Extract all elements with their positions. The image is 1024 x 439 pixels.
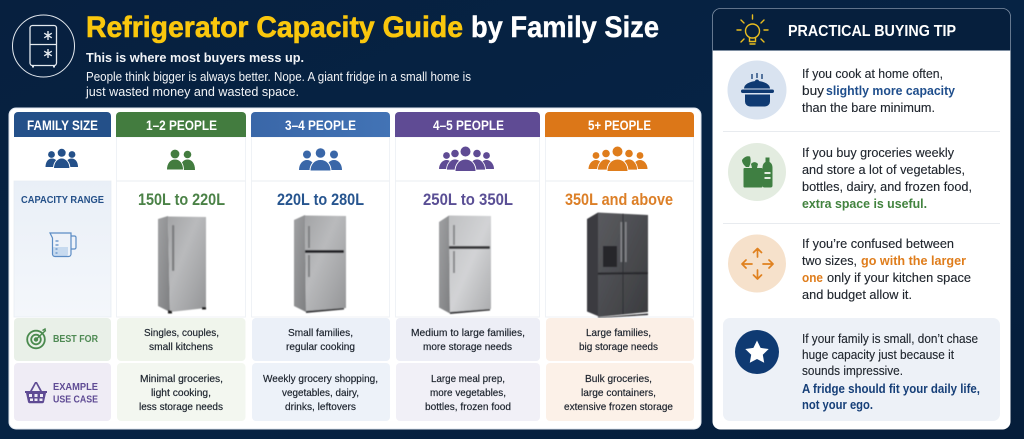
- column: family size labels: USE CASE: [53, 394, 98, 406]
- tip: cooking: slightly more capacity: [826, 84, 955, 98]
- column: 5+ people: 350L and above: [565, 191, 673, 209]
- tip: choosing between sizes: go with the larger: [861, 254, 966, 268]
- best for text: [286, 327, 355, 353]
- example use case text: Bulk groceries,: [585, 373, 652, 385]
- column: family size labels: [14, 112, 111, 421]
- best for text: more storage needs: [423, 341, 512, 353]
- best for text: Medium to large families,: [411, 327, 525, 339]
- example use case text: vegetables, dairy,: [282, 387, 359, 399]
- callout: small family advice: sounds impressive.: [802, 364, 903, 378]
- example use case text: large containers,: [581, 387, 656, 399]
- best for text: [144, 327, 219, 353]
- callout: small family advice: A fridge should fit your daily life,: [802, 382, 980, 396]
- column: family size labels: CAPACITY RANGE: [21, 194, 104, 206]
- subtitle text: [85, 50, 471, 99]
- tip: choosing between sizes: If you’re confused between: [802, 237, 954, 251]
- column: 3–4 people: 3–4 PEOPLE: [285, 118, 356, 133]
- tip: choosing between sizes: and budget allow it.: [802, 288, 912, 302]
- example use case text: Weekly grocery shopping,: [263, 373, 378, 385]
- tip: choosing between sizes: one: [802, 271, 823, 285]
- tip: choosing between sizes: [728, 234, 971, 302]
- column: 5+ people: 5+ PEOPLE: [588, 118, 651, 133]
- tip: cooking: If you cook at home often,: [802, 67, 943, 81]
- fridge: silver top freezer: [439, 216, 491, 314]
- column: 1–2 people: [116, 112, 246, 421]
- best for text: [411, 327, 525, 353]
- example use case text: less storage needs: [139, 401, 223, 413]
- icon: two people: [166, 150, 195, 170]
- best for text: Large families,: [586, 327, 651, 339]
- tip: choosing between sizes: only if your kitchen space: [827, 271, 971, 285]
- example use case text: more vegetables,: [430, 387, 506, 399]
- tip: cooking: buy: [802, 84, 825, 98]
- panel: practical buying tip: PRACTICAL BUYING TIP: [788, 23, 956, 40]
- tip: choosing between sizes: two sizes,: [802, 254, 857, 268]
- icon: five people: [588, 146, 648, 172]
- subtitle text: People think bigger is always better. Nope. A giant fridge in a small home is: [86, 70, 471, 84]
- column: 3–4 people: [251, 112, 390, 421]
- column: 4–5 people: [395, 112, 540, 421]
- best for text: small kitchens: [149, 341, 213, 353]
- icon: five people: [439, 146, 494, 172]
- icon: star badge: [735, 330, 779, 374]
- tip: groceries: bottles, dairy, and frozen food,: [802, 180, 972, 194]
- column: 3–4 people: 220L to 280L: [277, 191, 364, 209]
- example use case text: [263, 373, 378, 413]
- best for text: regular cooking: [286, 341, 355, 353]
- best for text: big storage needs: [579, 341, 658, 353]
- callout: small family advice: If your family is small, don’t chase: [802, 332, 978, 346]
- icon: grocery bag: [728, 143, 786, 201]
- best for text: [579, 327, 658, 353]
- example use case text: [139, 373, 223, 413]
- example use case text: light cooking,: [151, 387, 211, 399]
- callout: small family advice: [723, 318, 1000, 421]
- tip: groceries: extra space is useful.: [802, 197, 927, 211]
- example use case text: drinks, leftovers: [285, 401, 356, 413]
- fridge: single door: [158, 216, 206, 314]
- column: family size labels: FAMILY SIZE: [27, 118, 98, 133]
- fridge: french door: [587, 212, 648, 318]
- callout: small family advice: not your ego.: [802, 398, 873, 412]
- fridge: top freezer: [294, 215, 346, 313]
- column: family size labels: EXAMPLE: [53, 381, 98, 393]
- column: family size labels: BEST FOR: [53, 333, 98, 345]
- example use case text: [564, 373, 673, 413]
- icon: cooking pot: [728, 60, 786, 120]
- icon: light bulb: [737, 15, 768, 44]
- callout: small family advice: huge capacity just because it: [802, 348, 954, 362]
- icon: family size people: [46, 149, 78, 168]
- column: 5+ people: [545, 112, 694, 421]
- title: Refrigerator Capacity Guide: [86, 11, 463, 44]
- subtitle text: This is where most buyers mess up.: [86, 50, 304, 65]
- subtitle text: just wasted money and wasted space.: [85, 85, 299, 99]
- icon: basket: [25, 382, 47, 403]
- panel: practical buying tip: [712, 8, 1010, 430]
- title: [86, 11, 659, 44]
- example use case text: Minimal groceries,: [140, 373, 223, 385]
- title: by Family Size: [471, 11, 659, 44]
- column: 1–2 people: 150L to 220L: [138, 191, 225, 209]
- tip: groceries: [728, 143, 972, 211]
- icon: expand arrows: [728, 234, 786, 292]
- best for text: Singles, couples,: [144, 327, 219, 339]
- best for text: Small families,: [288, 327, 353, 339]
- icon: target: [27, 329, 46, 348]
- tip: groceries: If you buy groceries weekly: [802, 146, 955, 160]
- icon: three people: [299, 148, 342, 171]
- example use case text: extensive frozen storage: [564, 401, 673, 413]
- column: 4–5 people: 4–5 PEOPLE: [433, 118, 504, 133]
- tip: cooking: than the bare minimum.: [802, 101, 935, 115]
- tip: cooking: [728, 60, 955, 120]
- panel: comparison table: [9, 108, 701, 429]
- icon: measuring cup: [50, 233, 76, 256]
- example use case text: Large meal prep,: [431, 373, 505, 385]
- column: 1–2 people: 1–2 PEOPLE: [146, 118, 217, 133]
- tip: groceries: and store a lot of vegetables,: [802, 163, 965, 177]
- column: 4–5 people: 250L to 350L: [423, 191, 513, 209]
- example use case text: [425, 373, 511, 413]
- icon: fridge emblem: [12, 15, 74, 77]
- example use case text: bottles, frozen food: [425, 401, 511, 413]
